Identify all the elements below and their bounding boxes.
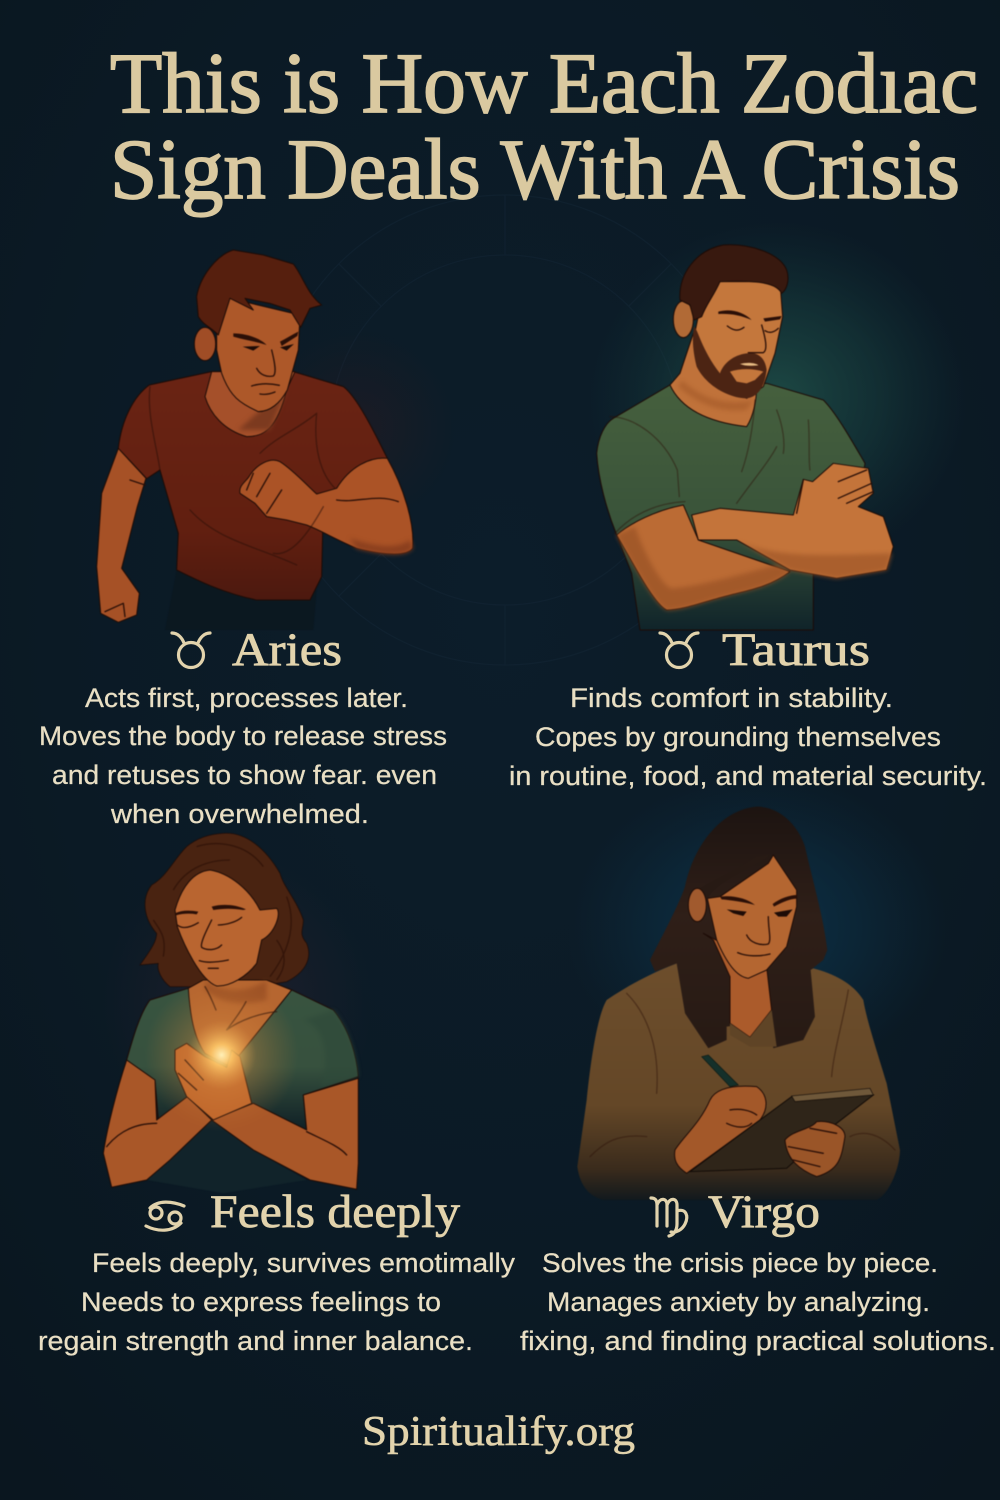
panel: Taurus (509, 245, 987, 791)
illustration: bearded man with crossed arms (597, 245, 893, 630)
description: Cancer: Feels deeply, survives emotimally (92, 1248, 516, 1278)
panel: Virgo (520, 807, 996, 1356)
heading: Virgo (651, 1186, 820, 1238)
description: Aries: when overwhelmed. (110, 799, 369, 829)
description: Virgo: Manages anxiety by analyzing. (547, 1287, 930, 1317)
panel: Aries (39, 250, 447, 829)
description: Taurus: in routine, food, and material security. (509, 761, 987, 791)
title: This is How Each Zodıac (110, 35, 978, 131)
footer: website: Spiritualify.org (362, 1409, 635, 1455)
icon: Taurus symbol (660, 633, 698, 668)
heading: Cancer: Feels deeply (210, 1186, 461, 1238)
icon: Virgo symbol (651, 1198, 687, 1236)
title: Sign Deals With A Crisis (110, 121, 960, 217)
icon: Cancer symbol (146, 1202, 184, 1230)
icon: Taurus-shaped symbol (172, 633, 210, 668)
illustration: woman with glowing hands at heart (103, 833, 358, 1193)
heading: Taurus (660, 624, 870, 676)
title (110, 35, 978, 217)
description: Taurus (509, 683, 987, 791)
description: Cancer: Needs to express feelings to (81, 1287, 441, 1317)
description: Aries (39, 683, 447, 829)
heading: Virgo: Virgo (708, 1186, 820, 1238)
panel: Cancer (38, 833, 516, 1356)
description: Taurus: Finds comfort in stability. (570, 683, 893, 713)
description: Virgo: fixing, and finding practical solutions. (520, 1326, 996, 1356)
description: Taurus: Copes by grounding themselves (535, 722, 941, 752)
heading: Aries: Aries (232, 624, 342, 676)
description: Virgo: Solves the crisis piece by piece. (542, 1248, 938, 1278)
illustration: running man in red shirt (97, 250, 413, 630)
description: Aries: Acts first, processes later. (85, 683, 408, 713)
illustration: woman writing in a notebook (577, 807, 900, 1200)
description: Cancer: regain strength and inner balance. (38, 1326, 473, 1356)
heading: Aries (172, 624, 342, 676)
description: Aries: Moves the body to release stress (39, 721, 447, 751)
description: Aries: and retuses to show fear. even (52, 760, 437, 790)
description: Cancer (38, 1248, 516, 1356)
description: Virgo (520, 1248, 996, 1356)
heading: Taurus: Taurus (722, 624, 870, 676)
